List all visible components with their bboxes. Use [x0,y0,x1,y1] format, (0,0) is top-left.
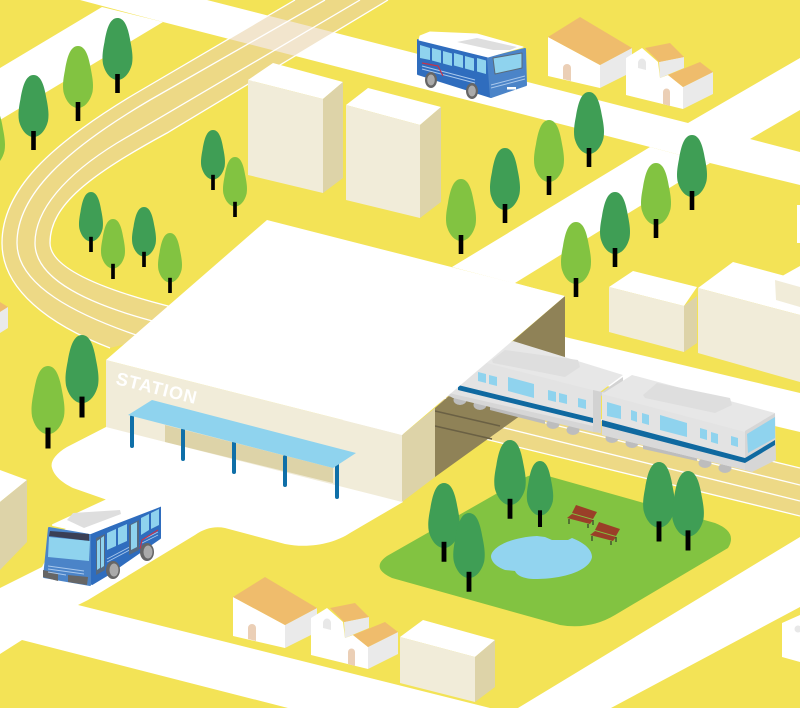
tree [446,179,476,254]
tree [66,335,98,418]
tree [32,366,64,448]
bus: lower left [43,500,160,585]
station sign: STATION [114,368,200,408]
canopy shadow on wall [165,425,333,483]
bus: top [418,32,526,99]
railway curve and tracks [2,0,800,516]
train [440,341,776,473]
park tree [428,483,460,562]
tree [641,163,671,238]
house: bottom gabled [233,577,317,648]
house: right edge [782,615,800,662]
tree [201,130,225,190]
tree [63,46,93,121]
building: tall block 1 [248,63,343,193]
house: bottom double [311,603,398,669]
tree [18,75,48,150]
tree [490,148,520,223]
bus shelter canopy [128,400,356,497]
tree [677,135,707,210]
tunnel opening under station [435,296,565,477]
tree [574,92,604,167]
building: tall block 2 [346,88,441,218]
station roof [106,220,565,435]
building: bottom cream block [400,620,495,702]
station front wall [106,360,402,502]
park lawn [380,474,731,626]
tree [79,192,103,252]
tree [0,105,5,180]
bench 1 [567,505,597,528]
pond [491,536,592,579]
station building [106,220,565,502]
house: top gabled [548,17,632,88]
park tree [672,471,704,550]
tree [223,157,247,217]
tree [534,120,564,195]
tree [561,222,591,297]
bench 2 [590,522,620,545]
station side wall [402,408,435,502]
park tree [453,513,485,592]
train car 2 [602,375,776,473]
building: right wide block [698,262,800,382]
tree [158,233,182,293]
building: left edge block [0,470,27,570]
house: top double [626,43,713,109]
house: left edge [0,302,8,333]
tree [132,207,156,267]
park tree [643,462,675,542]
house: right edge upper [797,205,800,243]
tree [101,219,125,279]
building: right low block [609,271,697,352]
tree [600,192,630,267]
park tree [527,461,553,527]
train car 1 [440,341,623,435]
tree [102,18,132,93]
park tree [494,440,526,519]
